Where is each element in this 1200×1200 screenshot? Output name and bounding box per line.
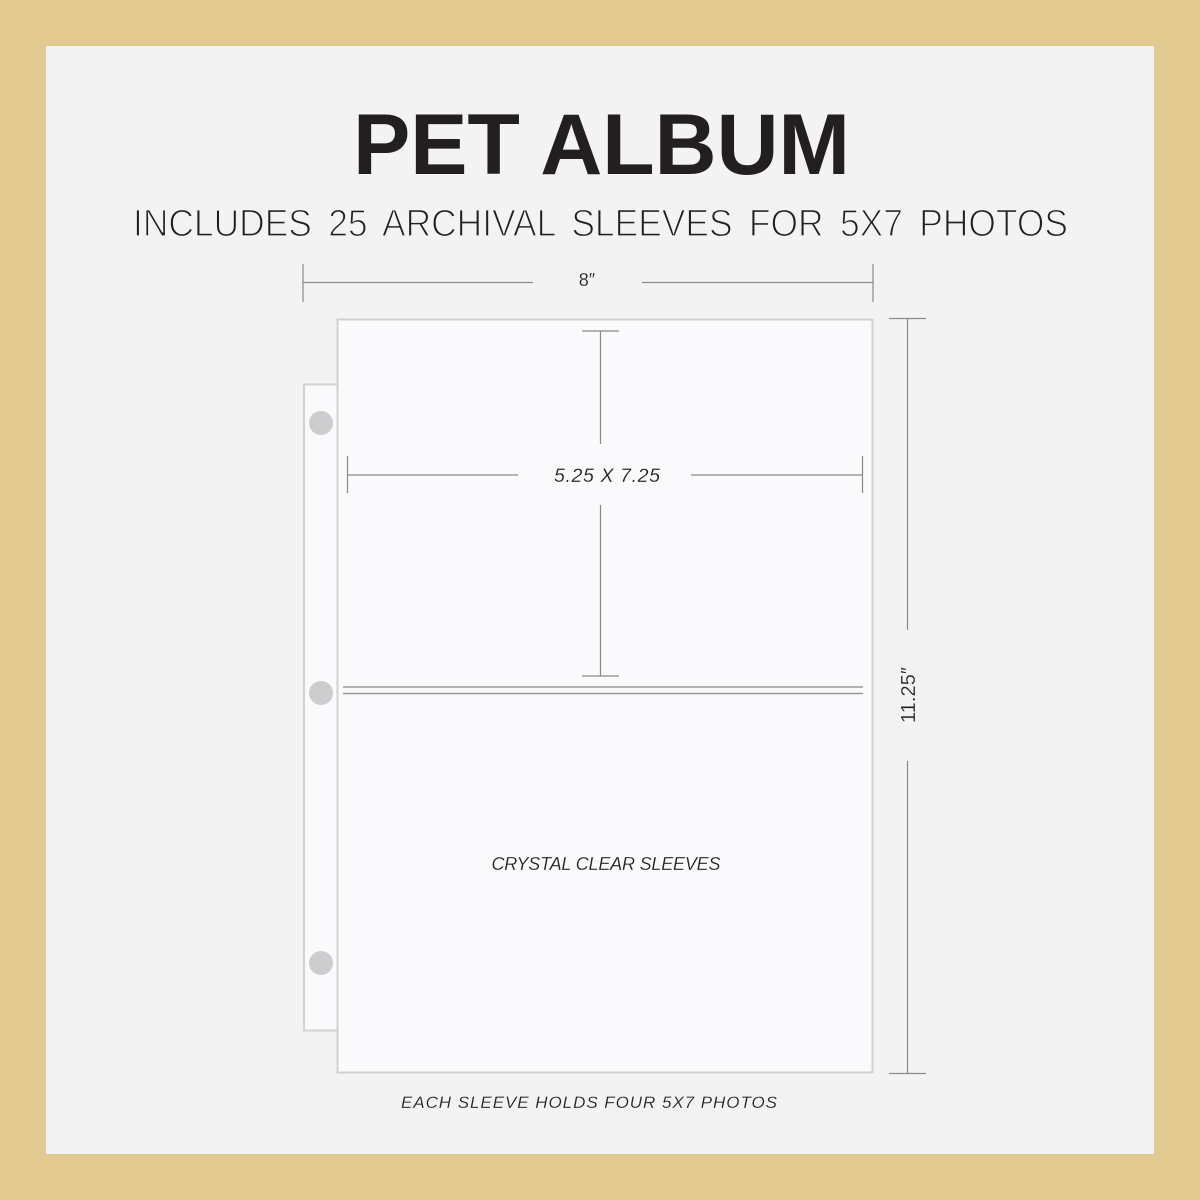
subtitle: INCLUDES 25 ARCHIVAL SLEEVES FOR 5X7 PHOTOS [133, 203, 1068, 245]
sleeve page [338, 320, 872, 1072]
sleeve divider [343, 687, 863, 694]
width label: 8″ [579, 270, 596, 290]
photo width dimension [348, 456, 862, 493]
footer caption: EACH SLEEVE HOLDS FOUR 5X7 PHOTOS [401, 1093, 778, 1112]
icon: binder hole bottom [309, 951, 333, 975]
photo size label: 5.25 X 7.25 [554, 465, 660, 487]
icon: binder hole top [309, 411, 333, 435]
icon: binder hole middle [309, 681, 333, 705]
height dimension: 11.25 inches [889, 318, 926, 1074]
height label: 11.25″ [898, 667, 920, 723]
photo height dimension [582, 331, 619, 676]
binder strip with punched holes [304, 384, 338, 1030]
sleeve label: CRYSTAL CLEAR SLEEVES [492, 854, 720, 874]
title: PET ALBUM [353, 97, 850, 193]
width dimension: 8 inches [303, 264, 873, 302]
